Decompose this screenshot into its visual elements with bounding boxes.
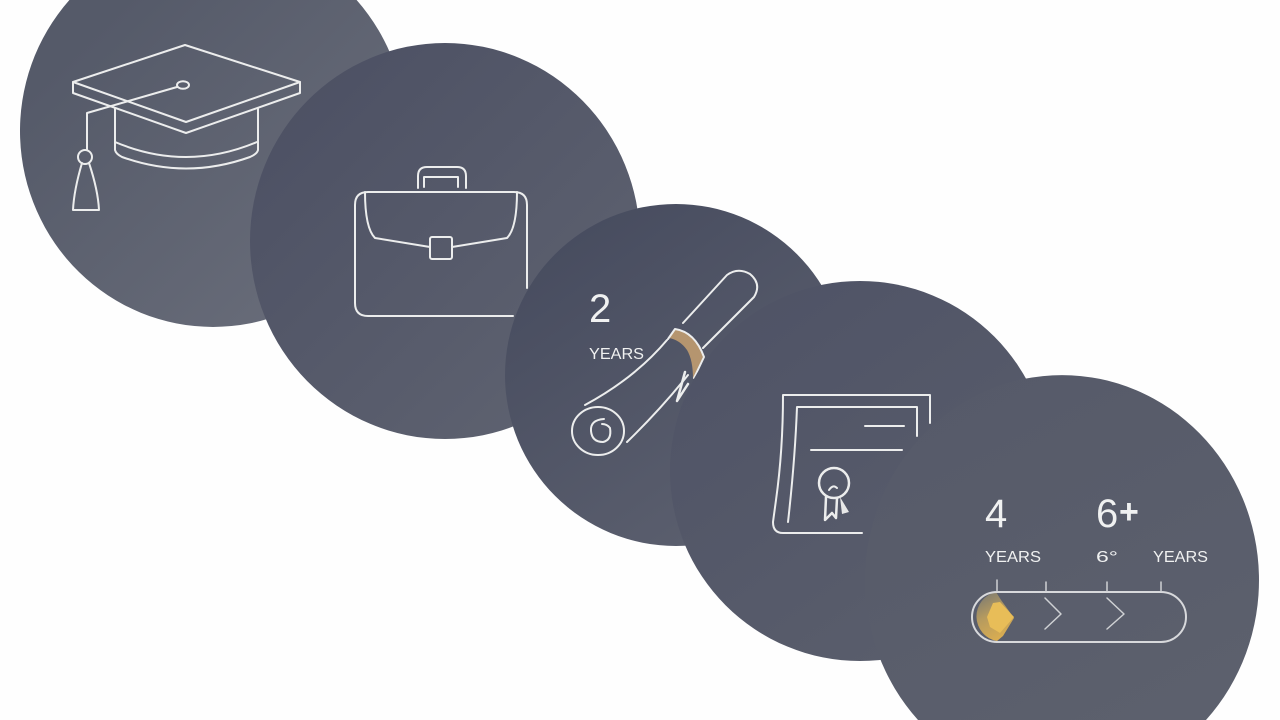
label: 4 years: [985, 492, 1041, 566]
icon: seal: [819, 468, 849, 520]
label: 6+: 6°: [1096, 549, 1118, 566]
label: 2 years: 2: [589, 287, 611, 331]
panel: education circle: [20, 0, 406, 327]
icon: rolled diploma: [572, 271, 757, 455]
label: years: YEARS: [1153, 549, 1208, 566]
panel: career timeline circle: [865, 375, 1259, 720]
icon: briefcase: [355, 167, 527, 316]
label: 2 years: [589, 287, 644, 363]
label: 4 years: 4: [985, 492, 1007, 536]
label: 4 years: YEARS: [985, 549, 1041, 566]
panel: two-year diploma circle: [505, 204, 847, 546]
label: 6+: [1096, 492, 1139, 566]
icon: certificate: [773, 395, 930, 533]
timeline bar: [972, 580, 1186, 642]
label: 6+: +: [1119, 493, 1139, 531]
panel: certificate circle: [670, 281, 1050, 661]
label: 2 years: YEARS: [589, 346, 644, 363]
label: 6+: 6: [1096, 492, 1118, 536]
icon: graduation cap: [73, 45, 300, 210]
panel: work experience circle: [250, 43, 640, 439]
